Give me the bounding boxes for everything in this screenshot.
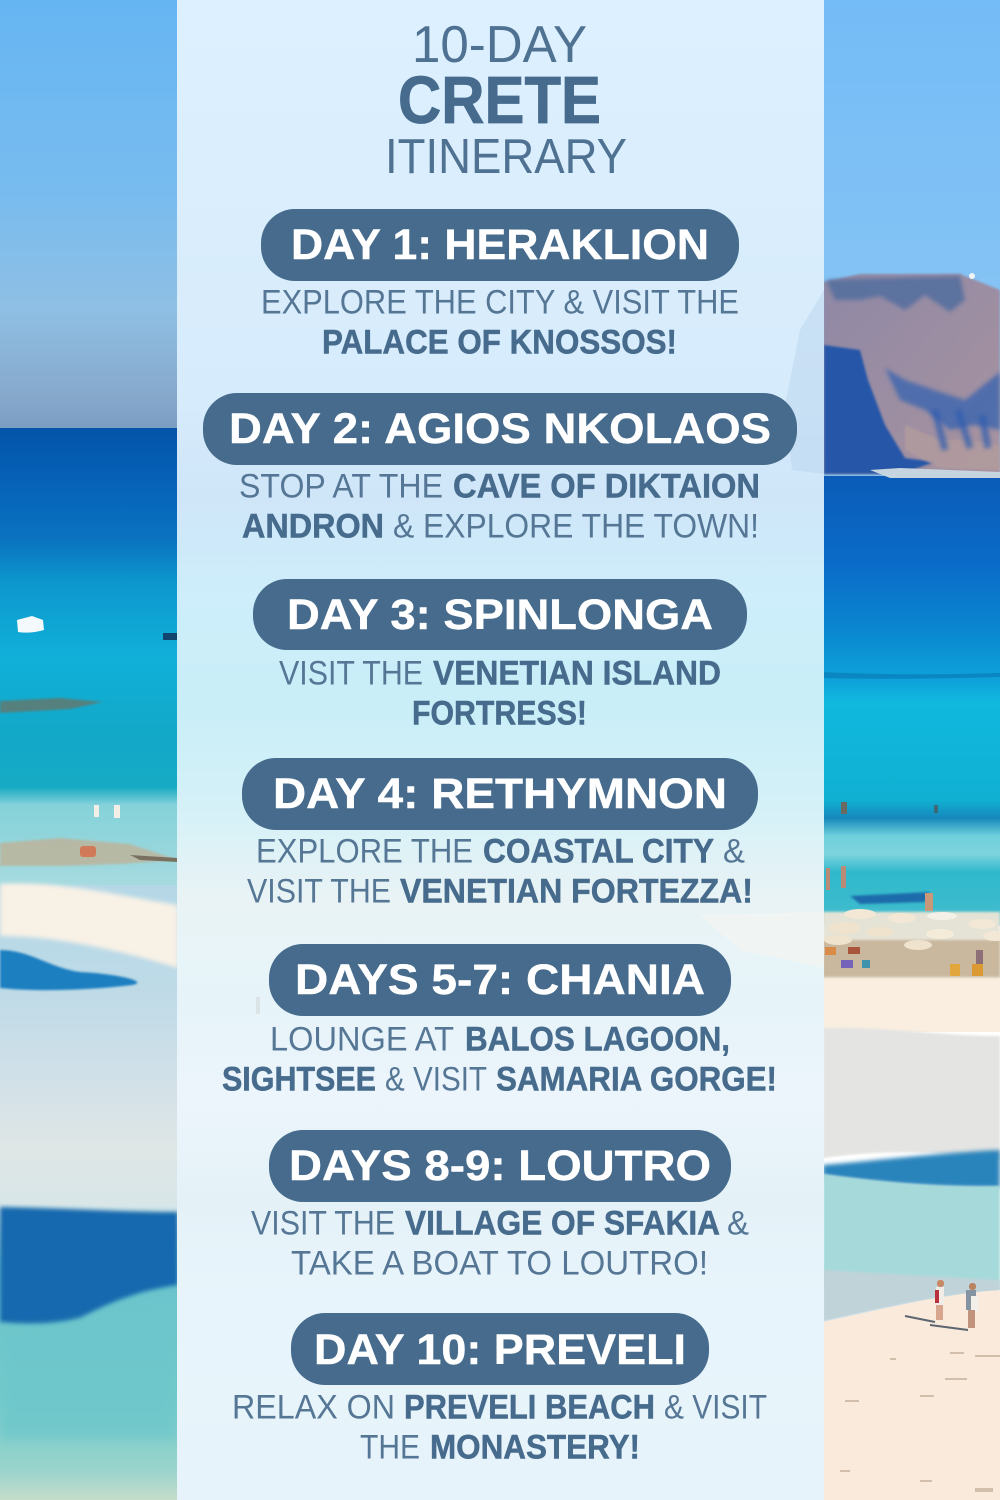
day 1 description: PALACE OF KNOSSOS! (322, 324, 677, 362)
sand right (823, 976, 1000, 1032)
days 8-9 pill (269, 1130, 731, 1202)
title: CRETE (398, 63, 601, 138)
beach umbrellas (823, 909, 1000, 978)
day 2 pill: DAY 2: AGIOS NKOLAOS (229, 405, 771, 453)
sea right (823, 476, 1000, 926)
days 8-9 description: VISIT THE (251, 1204, 395, 1242)
headland (823, 273, 1000, 478)
days 5-7 section (222, 944, 777, 1098)
waders left (94, 805, 99, 817)
day 2 description: STOP AT THE (239, 468, 443, 506)
day 10 description: RELAX ON (232, 1388, 395, 1426)
days 5-7 pill: DAYS 5-7: CHANIA (295, 956, 705, 1004)
day 1 description: EXPLORE THE CITY & VISIT THE (261, 284, 739, 322)
day 10 description: MONASTERY! (430, 1428, 640, 1466)
day 2 description: CAVE OF DIKTAION (453, 468, 760, 506)
sand beach right (823, 1290, 1000, 1500)
day 10 section (232, 1313, 767, 1466)
lower lagoon left (0, 885, 178, 1500)
day 10 pill: DAY 10: PREVELI (314, 1326, 686, 1374)
days 8-9 description (251, 1204, 749, 1282)
days 8-9 section (251, 1130, 749, 1282)
aqua shallows right (823, 1174, 1000, 1290)
day 1 pill: DAY 1: HERAKLION (291, 221, 709, 269)
sea left (0, 428, 178, 888)
day 2 description: & EXPLORE THE TOWN! (393, 508, 759, 546)
boat (17, 616, 44, 633)
day 10 description: THE (360, 1428, 420, 1466)
days 5-7 description: BALOS LAGOON, (465, 1020, 730, 1058)
days 8-9 pill: DAYS 8-9: LOUTRO (289, 1142, 711, 1190)
teal water bottom left (0, 1296, 178, 1440)
shadow streak right (823, 1150, 1000, 1188)
day 3 description: VENETIAN ISLAND (433, 654, 721, 692)
wader (925, 893, 933, 911)
day 4 description: EXPLORE THE (256, 832, 473, 870)
days 5-7 description: SAMARIA GORGE! (496, 1060, 777, 1098)
distant boat (163, 633, 178, 640)
day 10 pill (291, 1313, 709, 1385)
day 10 description: & VISIT (664, 1388, 767, 1426)
sunbathers (80, 846, 96, 857)
swimmers right (841, 802, 847, 814)
sky left (0, 0, 178, 430)
day 4 pill: DAY 4: RETHYMNON (273, 770, 727, 818)
translucent panel (177, 0, 824, 1500)
day 4 description: & (723, 832, 745, 870)
day 4 description: VENETIAN FORTEZZA! (400, 872, 753, 910)
deep shadow patch bottom left (0, 1207, 178, 1324)
ghost of headland through panel (785, 290, 824, 474)
day 4 description (247, 832, 753, 910)
day 3 description: VISIT THE (279, 654, 423, 692)
shadow patch in shallows (850, 892, 930, 904)
rocks near the shore (0, 838, 178, 866)
days 8-9 description: VILLAGE OF SFAKIA (405, 1204, 720, 1242)
ghost of beach through panel (700, 912, 824, 968)
days 8-9 description: & (727, 1204, 749, 1242)
days 5-7 pill (269, 944, 731, 1016)
sand debris (840, 1352, 1000, 1492)
day 4 pill (242, 758, 758, 830)
title: ITINERARY (385, 130, 627, 184)
day 10 description: PREVELI BEACH (404, 1388, 655, 1426)
reef (0, 698, 103, 713)
day 4 section (242, 758, 758, 910)
day 2 pill (203, 393, 797, 465)
day 4 description: VISIT THE (247, 872, 391, 910)
day 3 pill (253, 579, 747, 650)
title: 10-DAY (412, 16, 587, 74)
figures on beach (905, 1280, 979, 1330)
grey shallows right (823, 1028, 1000, 1160)
day 3 section (253, 579, 747, 732)
sand bank left (0, 883, 178, 968)
day 3 description (279, 654, 721, 732)
days 5-7 description: & VISIT (385, 1060, 487, 1098)
water streaks right (823, 672, 1000, 679)
title (385, 16, 627, 184)
days 8-9 description: TAKE A BOAT TO LOUTRO! (291, 1244, 708, 1282)
day 3 description: FORTRESS! (412, 694, 587, 732)
days 5-7 description: SIGHTSEE (222, 1060, 376, 1098)
sky right (823, 0, 1000, 480)
day 10 description (232, 1388, 767, 1466)
day 1 pill (261, 209, 739, 281)
day 2 description (239, 468, 760, 546)
dark rock on the shore (130, 855, 178, 862)
grey wet sand right (823, 1270, 1000, 1322)
day 2 description: ANDRON (242, 508, 384, 546)
days 5-7 description (222, 1020, 777, 1098)
shadow on water left (0, 950, 137, 990)
day 3 pill: DAY 3: SPINLONGA (287, 591, 713, 639)
day 4 description: COASTAL CITY (483, 832, 714, 870)
faint figure in panel (256, 997, 260, 1014)
day 1 section (261, 209, 739, 362)
day 1 description (261, 284, 739, 362)
day 2 section (203, 393, 797, 546)
waders by the beach (826, 868, 830, 890)
days 5-7 description: LOUNGE AT (270, 1020, 454, 1058)
